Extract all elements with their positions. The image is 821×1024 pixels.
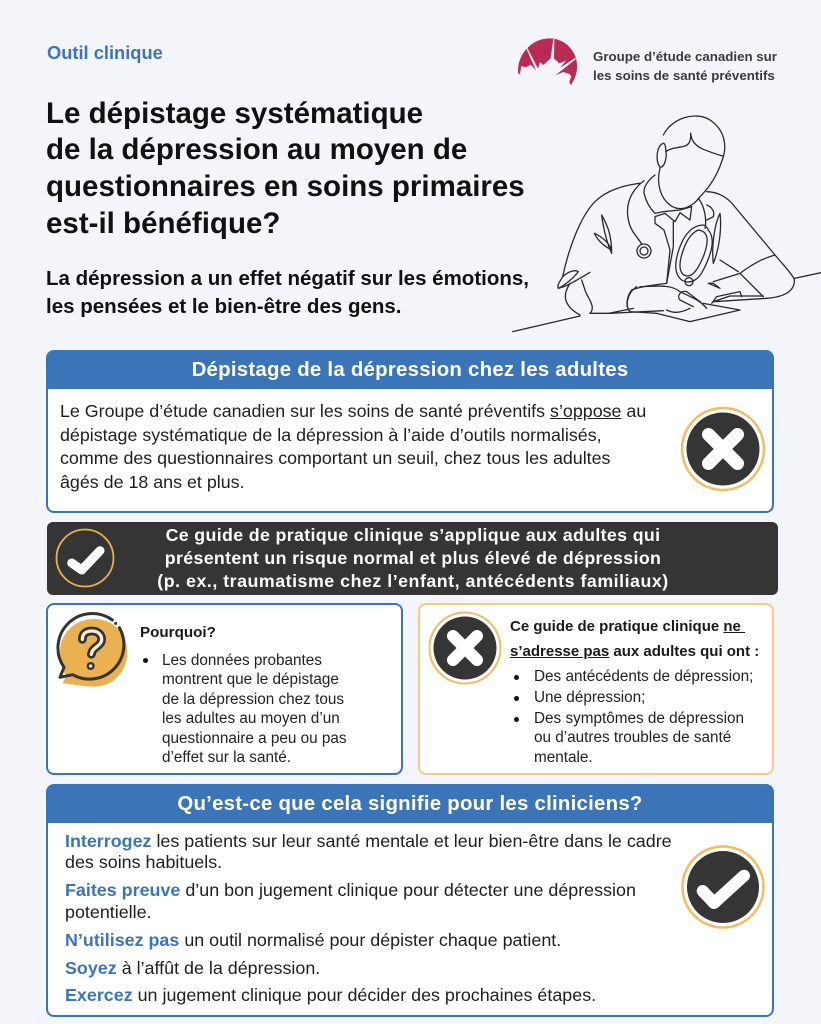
- clinician guidance: Faites preuve d’un bon jugement clinique pour détecter une dépression: [65, 880, 636, 900]
- not intended heading: s’adresse pas aux adultes qui ont :: [510, 643, 759, 660]
- title: questionnaires en soins primaires: [46, 170, 525, 203]
- label: Outil clinique: Outil clinique: [47, 42, 163, 63]
- clinician guidance: Soyez à l’affût de la dépression.: [65, 958, 320, 978]
- banner text: [157, 525, 669, 591]
- panel text: âgés de 18 ans et plus.: [60, 472, 245, 492]
- logo text: les soins de santé préventifs: [593, 68, 775, 83]
- panel heading: [47, 785, 773, 823]
- banner text: Ce guide de pratique clinique s’applique aux adultes qui: [166, 525, 660, 545]
- icon: check: [56, 528, 114, 588]
- panel: not intended for: [418, 603, 774, 775]
- illustration: doctor line drawing: [512, 115, 821, 332]
- why text: de la dépression chez tous: [162, 691, 344, 708]
- panel: screening in adults: [46, 350, 774, 513]
- logo text: [593, 49, 777, 83]
- icon: check: [681, 845, 765, 929]
- logo text: Groupe d’étude canadien sur: [593, 49, 777, 64]
- subtitle: les pensées et le bien-être des gens.: [46, 295, 402, 318]
- not intended heading: Ce guide de pratique clinique ne: [510, 618, 741, 635]
- panel text: [60, 401, 646, 492]
- title: est-il bénéfique?: [46, 207, 280, 240]
- icon: cross: [428, 612, 502, 684]
- bullet: [142, 658, 148, 662]
- bullets: [514, 675, 519, 722]
- icon: question bubble: [56, 612, 128, 687]
- why heading: Pourquoi?: [140, 624, 216, 641]
- exclusions list: ou d’autres troubles de santé: [534, 729, 731, 746]
- icon: cross: [680, 406, 766, 492]
- clinician guidance: N’utilisez pas un outil normalisé pour dépister chaque patient.: [65, 930, 561, 950]
- panel: for clinicians: [46, 784, 774, 1017]
- panel text: comme des questionnaires comportant un seuil, chez tous les adultes: [60, 448, 610, 468]
- clinician guidance: [65, 831, 672, 1005]
- exclusions list: Des symptômes de dépression: [534, 710, 744, 727]
- clinician guidance: Exercez un jugement clinique pour décider des prochaines étapes.: [65, 985, 596, 1005]
- banner text: (p. ex., traumatisme chez l’enfant, antécédents familiaux): [157, 571, 669, 591]
- icon: maple leaf logo: [518, 38, 578, 86]
- why text: questionnaire a peu ou pas: [162, 730, 347, 747]
- subtitle: La dépression a un effet négatif sur les émotions,: [46, 267, 529, 290]
- exclusions list: mentale.: [534, 749, 593, 766]
- title: Le dépistage systématique: [46, 97, 423, 130]
- panel: why: [46, 603, 403, 775]
- panel text: dépistage systématique de la dépression à l’aide d’outils normalisés,: [60, 425, 602, 445]
- subtitle: [46, 267, 529, 318]
- clinician guidance: Interrogez les patients sur leur santé mentale et leur bien-être dans le cadre: [65, 831, 672, 851]
- clinician guidance: potentielle.: [65, 902, 152, 922]
- title: de la dépression au moyen de: [46, 133, 467, 166]
- exclusions list: [534, 668, 753, 766]
- banner: applies to: [47, 522, 778, 595]
- banner text: présentent un risque normal et plus élevé de dépression: [165, 548, 661, 568]
- panel text: Le Groupe d’étude canadien sur les soins de santé préventifs s’oppose au: [60, 401, 646, 421]
- why text: d’effet sur la santé.: [162, 749, 291, 766]
- why text: [162, 652, 347, 766]
- exclusions list: Des antécédents de dépression;: [534, 668, 753, 685]
- panel heading: [47, 351, 773, 389]
- title: [46, 97, 525, 240]
- panel heading: Dépistage de la dépression chez les adultes: [192, 359, 628, 381]
- panel heading: Qu’est-ce que cela signifie pour les cliniciens?: [177, 793, 643, 815]
- why text: Les données probantes: [162, 652, 322, 669]
- exclusions list: Une dépression;: [534, 689, 645, 706]
- clinician guidance: des soins habituels.: [65, 852, 222, 872]
- why text: montrent que le dépistage: [162, 671, 339, 688]
- why text: les adultes au moyen d’un: [162, 710, 340, 727]
- not intended heading: [510, 618, 759, 660]
